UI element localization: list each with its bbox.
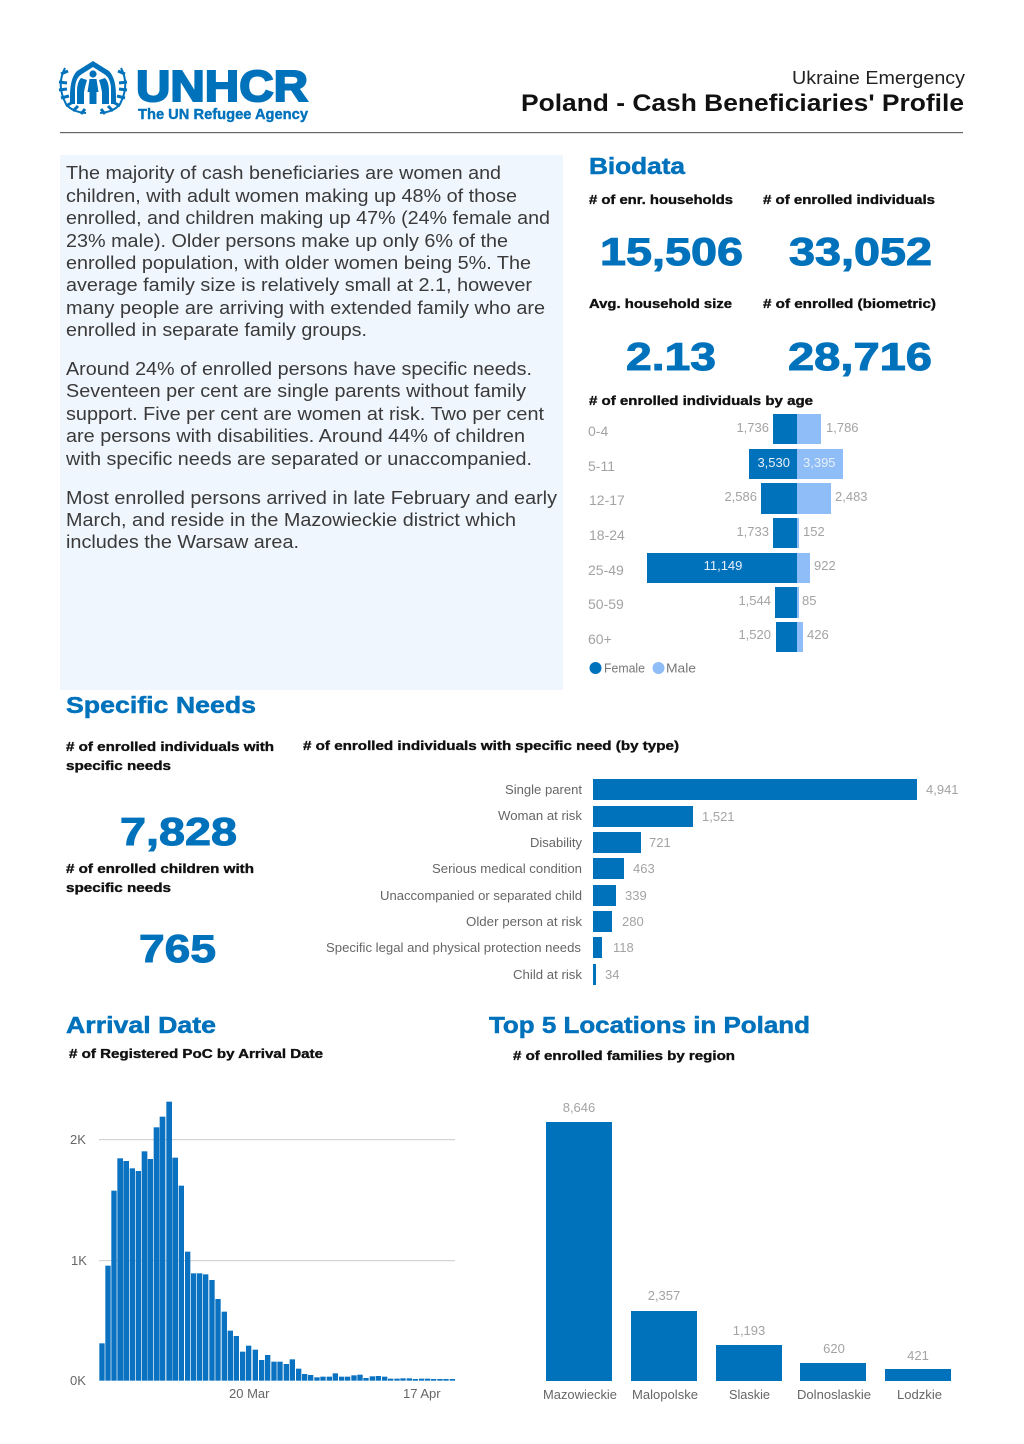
- KPI: biometric: 28,716: [788, 336, 932, 379]
- text block: paragraph 1: children, with adult women making up 48% of those: [66, 186, 517, 206]
- female values: 3,530: [757, 455, 790, 470]
- values: 2,357: [648, 1288, 680, 1303]
- category labels: Serious medical condition: [432, 861, 582, 876]
- age axis labels: 12-17: [589, 492, 625, 508]
- y axis labels: 1K: [71, 1253, 87, 1268]
- logo: UNHCR: [59, 61, 309, 123]
- values: 1,193: [733, 1323, 765, 1338]
- category labels: Child at risk: [513, 967, 582, 982]
- text block: paragraph 2: [65, 359, 544, 469]
- chart: arrivals histogram: [70, 1102, 455, 1401]
- values: 721: [649, 835, 671, 850]
- values: 34: [605, 967, 619, 982]
- histogram bars: [99, 1102, 455, 1381]
- heading: Top 5 Locations: Top 5 Locations in Poland: [489, 1012, 810, 1038]
- female values: 1,736: [736, 420, 769, 435]
- heading: Specific Needs: Specific Needs: [66, 692, 256, 718]
- age axis labels: 18-24: [589, 527, 625, 543]
- text block: paragraph 1: [66, 163, 550, 340]
- heading: Arrival Date: Arrival Date: [66, 1012, 216, 1038]
- text block: paragraph 1: enrolled in separate family groups.: [66, 320, 367, 340]
- icon: UNHCR emblem: [59, 61, 127, 114]
- text block: paragraph 1: The majority of cash beneficiaries are women and: [66, 163, 501, 183]
- subtitle: Ukraine Emergency: [792, 67, 966, 88]
- male values: 1,786: [826, 420, 859, 435]
- female values: 2,586: [724, 489, 757, 504]
- title: Poland - Cash Beneficiaries' Profile: [521, 90, 964, 117]
- values: 4,941: [926, 782, 959, 797]
- values: [605, 782, 959, 982]
- text block: paragraph 2: Seventeen per cent are single parents without family: [66, 381, 526, 401]
- values: 421: [907, 1348, 929, 1363]
- category labels: Slaskie: [729, 1387, 770, 1402]
- female values: [704, 420, 790, 642]
- panel: specific needs KPIs: [66, 740, 274, 971]
- text block: paragraph 1: 23% male). Older persons make up only 6% of the: [66, 231, 508, 251]
- KPI: individuals with specific needs: [66, 740, 274, 854]
- values: 8,646: [563, 1100, 595, 1115]
- chart: top 5 locations: [543, 1100, 951, 1402]
- KPI: individuals with specific needs: specific needs: [66, 759, 171, 773]
- age axis labels: 25-49: [588, 562, 624, 578]
- values: 463: [633, 861, 655, 876]
- KPI: children with specific needs: 765: [139, 928, 216, 971]
- age axis labels: 0-4: [588, 423, 608, 439]
- chart: specific need by type: [303, 739, 959, 985]
- heading: Biodata: Biodata: [589, 153, 685, 179]
- KPI: household size: [589, 297, 732, 379]
- category labels: Mazowieckie: [543, 1387, 617, 1402]
- text block: paragraph 1: many people are arriving with extended family who are: [66, 298, 545, 318]
- text block: paragraph 2: are persons with disabilities. Around 44% of children: [66, 426, 525, 446]
- logo wordmark: UNHCR: [136, 62, 308, 111]
- KPI: households: # of enr. households: [589, 193, 733, 207]
- age axis labels: 60+: [588, 631, 612, 647]
- category labels: [543, 1387, 942, 1402]
- KPI: households: 15,506: [600, 231, 743, 274]
- category labels: Malopolske: [632, 1387, 698, 1402]
- logo tagline: The UN Refugee Agency: [138, 106, 309, 123]
- y axis labels: [70, 1132, 87, 1388]
- text block: paragraph 3: [66, 488, 557, 552]
- KPI: individuals with specific needs: 7,828: [120, 811, 237, 854]
- KPI: biometric: [763, 297, 936, 379]
- KPI: individuals with specific needs: # of enrolled individuals with: [66, 740, 274, 754]
- female values: 1,520: [738, 627, 771, 642]
- age axis labels: 50-59: [588, 596, 624, 612]
- male bars: [797, 414, 843, 652]
- chart title: # of enrolled individuals by age: [589, 394, 813, 408]
- text block: paragraph 2: with specific needs are separated or unaccompanied.: [65, 449, 532, 469]
- x axis labels: 17 Apr: [403, 1386, 441, 1401]
- chart: enrolled individuals by age: [588, 394, 868, 676]
- KPI: children with specific needs: # of enrolled children with: [66, 862, 254, 876]
- KPI: households: [589, 193, 743, 274]
- header title block: [521, 67, 966, 117]
- category labels: Dolnoslaskie: [797, 1387, 871, 1402]
- age axis labels: 5-11: [588, 458, 615, 474]
- y axis labels: 0K: [70, 1373, 86, 1388]
- category labels: Older person at risk: [466, 914, 583, 929]
- chart title: # of enrolled individuals with specific need (by type): [303, 739, 679, 753]
- male values: 85: [802, 593, 816, 608]
- text block: paragraph 2: support. Five per cent are women at risk. Two per cent: [66, 404, 544, 424]
- text block: paragraph 2: Around 24% of enrolled persons have specific needs.: [66, 359, 532, 379]
- panel: biodata KPIs: [589, 193, 936, 379]
- female values: 11,149: [704, 558, 742, 573]
- KPI: biometric: # of enrolled (biometric): [763, 297, 936, 311]
- age axis labels: [588, 423, 625, 647]
- text block: paragraph 1: enrolled, and children making up 47% (24% female and: [66, 208, 550, 228]
- values: 118: [613, 940, 634, 955]
- male values: 152: [803, 524, 825, 539]
- category labels: [326, 782, 583, 982]
- values: 339: [625, 888, 647, 903]
- KPI: children with specific needs: specific needs: [66, 881, 171, 895]
- panel: summary narrative: [60, 155, 563, 690]
- x axis labels: 20 Mar: [229, 1386, 270, 1401]
- y axis labels: 2K: [70, 1132, 86, 1147]
- KPI: individuals: # of enrolled individuals: [763, 193, 935, 207]
- legend: Female: [604, 660, 645, 676]
- legend: [590, 660, 696, 676]
- text block: paragraph 3: Most enrolled persons arrived in late February and early: [66, 488, 557, 508]
- values: [563, 1100, 929, 1363]
- chart subtitle: arrival date: # of Registered PoC by Arrival Date: [69, 1047, 323, 1061]
- text block: paragraph 3: March, and reside in the Mazowieckie district which: [66, 510, 516, 530]
- category labels: Single parent: [505, 782, 582, 797]
- KPI: children with specific needs: [66, 862, 254, 971]
- category labels: Disability: [530, 835, 582, 850]
- chart subtitle: locations: # of enrolled families by region: [513, 1049, 735, 1063]
- KPI: individuals: [763, 193, 935, 274]
- category labels: Unaccompanied or separated child: [380, 888, 582, 903]
- KPI: household size: 2.13: [626, 336, 716, 379]
- bars: [546, 1122, 951, 1381]
- male values: 426: [807, 627, 829, 642]
- values: 1,521: [702, 809, 735, 824]
- male values: 2,483: [835, 489, 868, 504]
- text block: paragraph 3: includes the Warsaw area.: [66, 532, 299, 552]
- male values: 922: [814, 558, 836, 573]
- female bars: [647, 414, 797, 652]
- category labels: Lodzkie: [897, 1387, 942, 1402]
- text block: paragraph 1: average family size is relatively small at 2.1, however: [66, 275, 532, 295]
- female values: 1,733: [736, 524, 769, 539]
- KPI: household size: Avg. household size: [589, 297, 732, 311]
- category labels: Woman at risk: [498, 808, 583, 823]
- female values: 1,544: [738, 593, 771, 608]
- male values: 3,395: [803, 455, 836, 470]
- category labels: Specific legal and physical protection needs: [326, 940, 581, 955]
- bars: [593, 779, 917, 985]
- male values: [802, 420, 868, 642]
- legend: Male: [666, 660, 696, 676]
- values: 620: [823, 1341, 845, 1356]
- text block: paragraph 1: enrolled population, with older women being 5%. The: [66, 253, 531, 273]
- KPI: individuals: 33,052: [789, 231, 932, 274]
- x axis labels: [229, 1386, 441, 1401]
- values: 280: [622, 914, 644, 929]
